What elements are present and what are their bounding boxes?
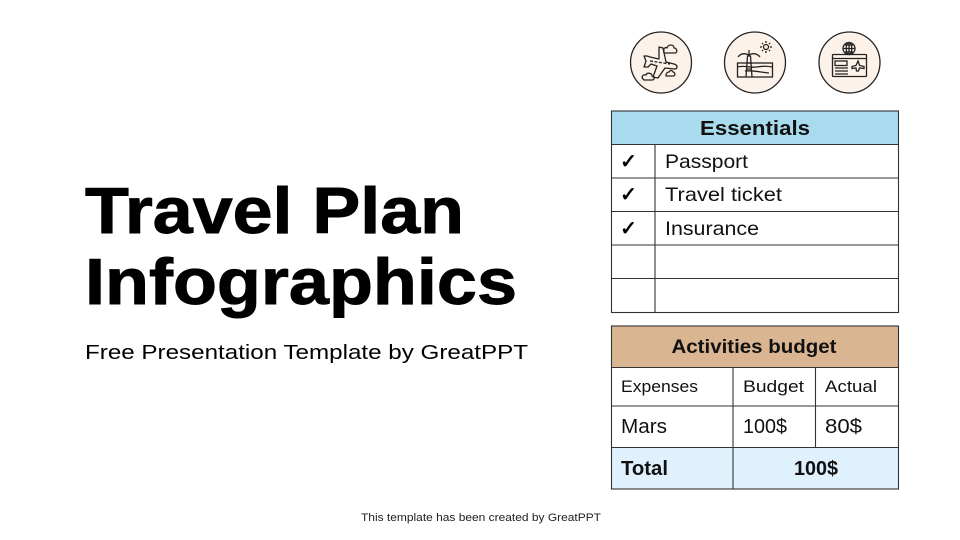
budget values: 80$ — [825, 416, 862, 438]
essentials items: Insurance — [665, 218, 759, 240]
check marks — [620, 149, 637, 240]
budget grid — [612, 326, 898, 489]
total row: 100$ — [794, 458, 838, 480]
icon: passport with globe and plane — [819, 32, 880, 93]
total row: Total — [621, 458, 668, 480]
budget column labels: Actual — [825, 377, 877, 396]
budget values: 100$ — [743, 416, 787, 438]
budget values: Mars — [621, 416, 667, 438]
essentials grid — [612, 111, 898, 312]
panel: essentials table — [612, 111, 898, 312]
budget column labels: Budget — [743, 377, 804, 396]
panel: activities budget table — [612, 326, 898, 489]
total row background — [612, 448, 898, 489]
essentials header — [612, 111, 898, 144]
check marks: ✓ — [620, 216, 637, 240]
subtitle: Free Presentation Template by GreatPPT — [85, 341, 529, 364]
icon: airplane and clouds — [630, 32, 692, 93]
check marks: ✓ — [620, 149, 637, 173]
title — [85, 174, 517, 318]
budget values — [621, 416, 862, 438]
check marks: ✓ — [620, 182, 637, 206]
budget header: Activities budget — [672, 337, 837, 358]
budget column labels: Expenses — [621, 377, 698, 396]
title: Travel Plan — [85, 174, 464, 247]
icon: beach with palm and sun — [724, 32, 786, 93]
essentials items: Travel ticket — [665, 184, 783, 206]
budget header — [612, 326, 898, 368]
budget column labels — [621, 377, 877, 396]
essentials items — [665, 151, 783, 240]
essentials items: Passport — [665, 151, 749, 173]
total row — [621, 458, 838, 480]
title: Infographics — [85, 245, 517, 318]
footer credit: This template has been created by GreatPPT — [361, 512, 601, 524]
essentials header: Essentials — [700, 118, 810, 140]
